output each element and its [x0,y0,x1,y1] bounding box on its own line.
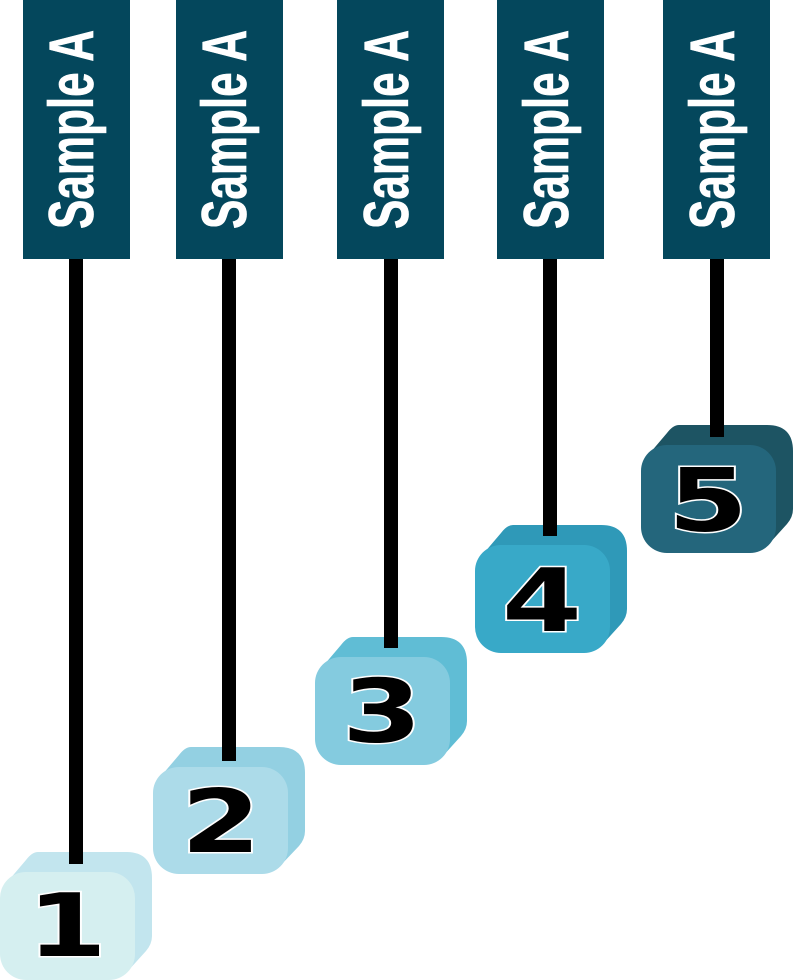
connector line 4 [543,255,557,536]
step 5: block with number [641,425,793,553]
banner 3 [337,0,444,259]
connector line 1 [69,255,83,864]
connector line 2 [222,255,236,761]
step 1: block with number [0,852,152,980]
step 3: block with number: 3 [342,662,422,763]
step 4: block with number [475,525,627,653]
connector line 5 [710,255,724,437]
banner 4 [497,0,604,259]
step 5: block with number: 5 [668,451,748,552]
banner 2 [176,0,283,259]
step 2: block with number [153,747,305,874]
banner 5 [663,0,770,259]
connector line 3 [384,255,398,648]
banner 1 [23,0,130,259]
step 4: block with number: 4 [502,551,582,652]
step 3: block with number [315,637,467,765]
step 1: block with number: 1 [27,876,107,977]
step 2: block with number: 2 [181,772,261,873]
